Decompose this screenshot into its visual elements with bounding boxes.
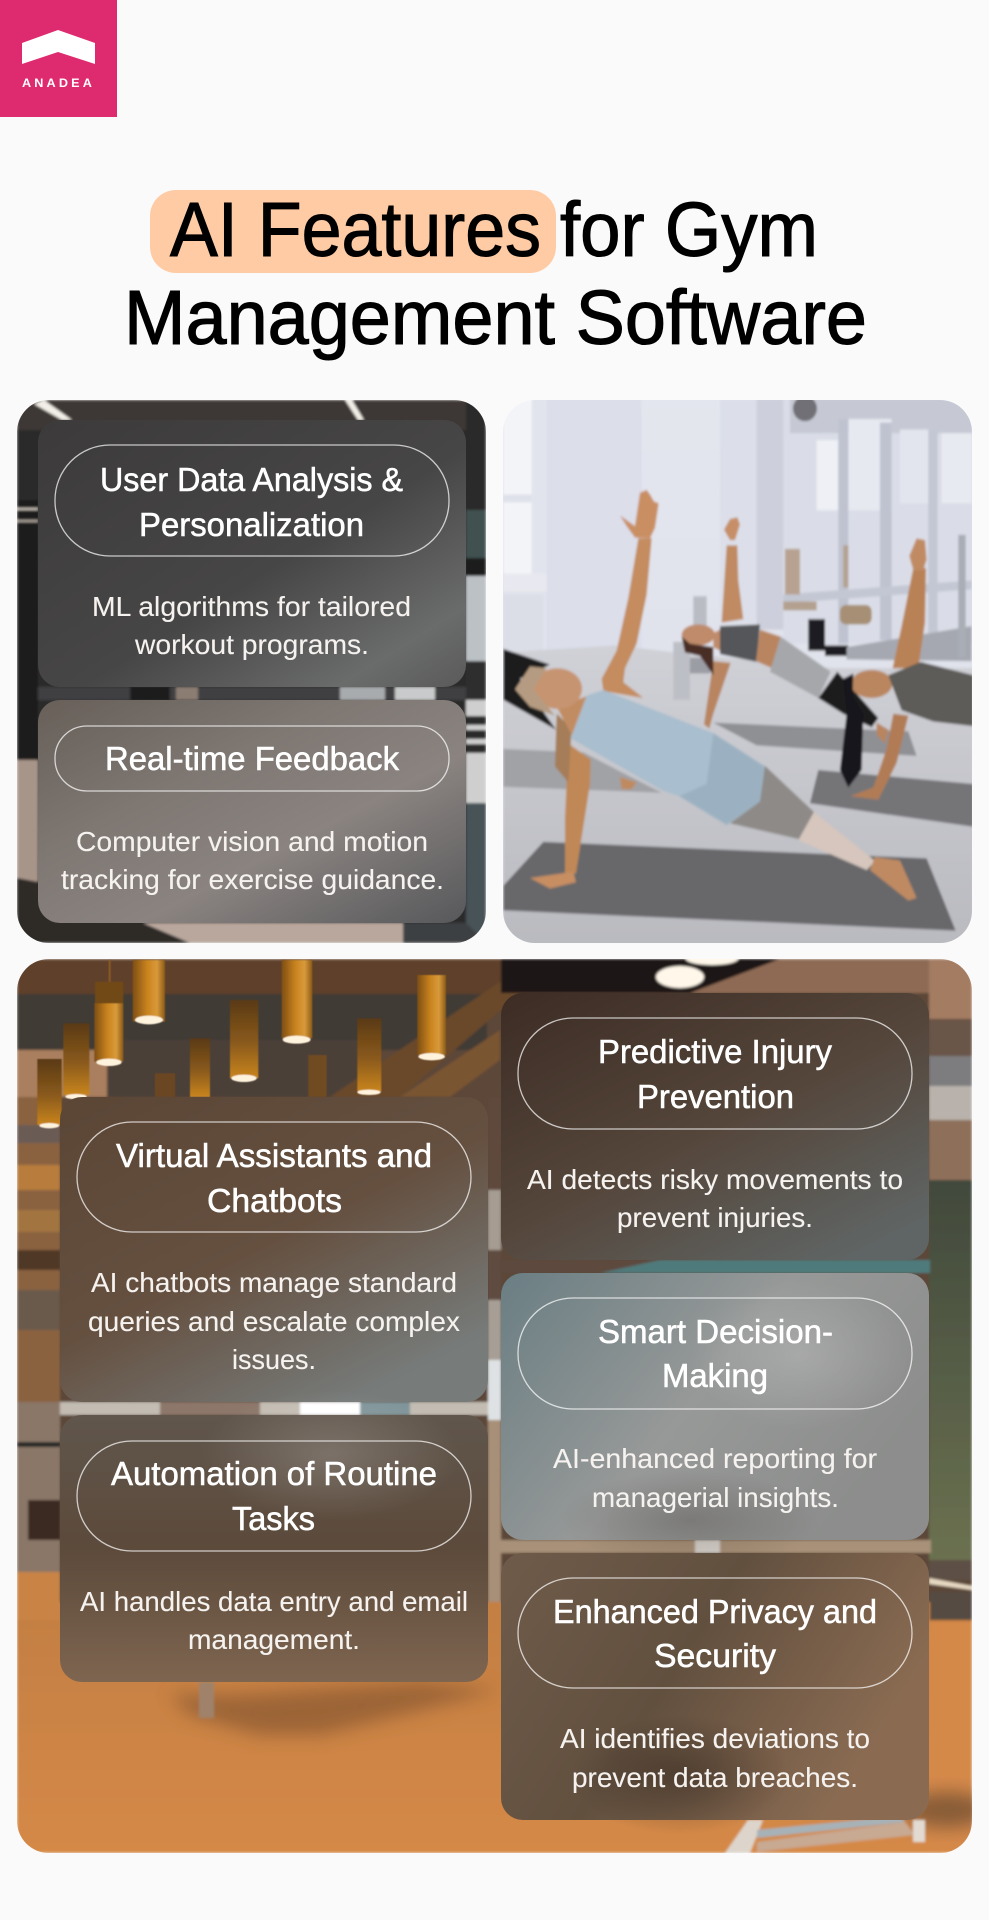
card: Virtual Assistants and Chatbots [60,1097,488,1402]
description: AI chatbots manage standard [91,1267,457,1298]
title highlight [150,190,556,273]
description: AI detects risky movements to [527,1164,903,1195]
card: Enhanced Privacy and Security [501,1553,929,1835]
logo: Anadea: ANADEA [22,76,95,90]
pill heading [518,1578,912,1688]
title [124,187,867,361]
description: tracking for exercise guidance. [61,864,444,895]
card: User Data Analysis and Personalization [38,420,466,687]
title: AI Features [170,187,541,273]
pill heading: Tasks [232,1500,315,1537]
description [560,1723,870,1793]
description: prevent data breaches. [572,1762,858,1793]
pill heading: Real-time Feedback [105,740,399,777]
card: Automation of Routine Tasks [60,1390,488,1682]
pill heading: Automation of Routine [111,1455,437,1492]
description: prevent injuries. [617,1202,813,1233]
pill heading [77,1122,471,1232]
photo: gym with pendant lamps [17,953,989,1853]
description: AI-enhanced reporting for [553,1443,877,1474]
pill heading: Prevention [637,1078,794,1115]
figure: woman on the right [840,538,973,800]
figure: woman in the middle [682,517,888,744]
floor shadow and post [170,1682,500,1735]
pill heading [55,445,449,556]
description [88,1267,460,1375]
pill heading: Security [654,1637,776,1674]
description [553,1443,877,1513]
description [61,826,444,895]
figure: woman in front [503,490,917,900]
photo background: studio room [503,400,972,917]
panel: gym with pendant lamps photo and five cards [17,953,989,1853]
pill heading: Smart Decision- [598,1313,833,1350]
pill heading [77,1441,471,1551]
card: Smart Decision-Making [501,1273,929,1570]
description [527,1164,903,1233]
description [80,1586,468,1655]
panel: gym interior photo with two cards [17,400,486,943]
panel: yoga class photo [500,396,983,959]
logo: Anadea [0,0,117,117]
pill heading: Chatbots [207,1182,342,1219]
description: Computer vision and motion [76,826,428,857]
photo: dark gym [17,400,486,943]
pill heading [518,1298,912,1409]
pill heading [55,726,449,791]
pill heading [518,1018,912,1129]
description: management. [188,1624,360,1655]
card: Real-time Feedback [38,700,466,923]
description: issues. [232,1344,316,1375]
card: Predictive Injury Prevention [501,993,929,1260]
description: managerial insights. [592,1482,839,1513]
description: workout programs. [134,629,369,660]
pill heading: Making [662,1357,768,1394]
photo floor and mats [503,596,973,949]
pill heading: User Data Analysis & [100,461,403,498]
description [92,591,411,660]
title: for Gym [560,187,818,273]
pill heading: Virtual Assistants and [116,1137,432,1174]
pill heading: Predictive Injury [598,1033,832,1070]
pill heading: Personalization [139,506,364,543]
description: AI identifies deviations to [560,1723,870,1754]
pendant lamps [37,960,446,1128]
description: queries and escalate complex [88,1306,460,1337]
description: ML algorithms for tailored [92,591,411,622]
description: AI handles data entry and email [80,1586,468,1617]
pill heading: Enhanced Privacy and [553,1593,877,1630]
title: Management Software [124,275,867,361]
